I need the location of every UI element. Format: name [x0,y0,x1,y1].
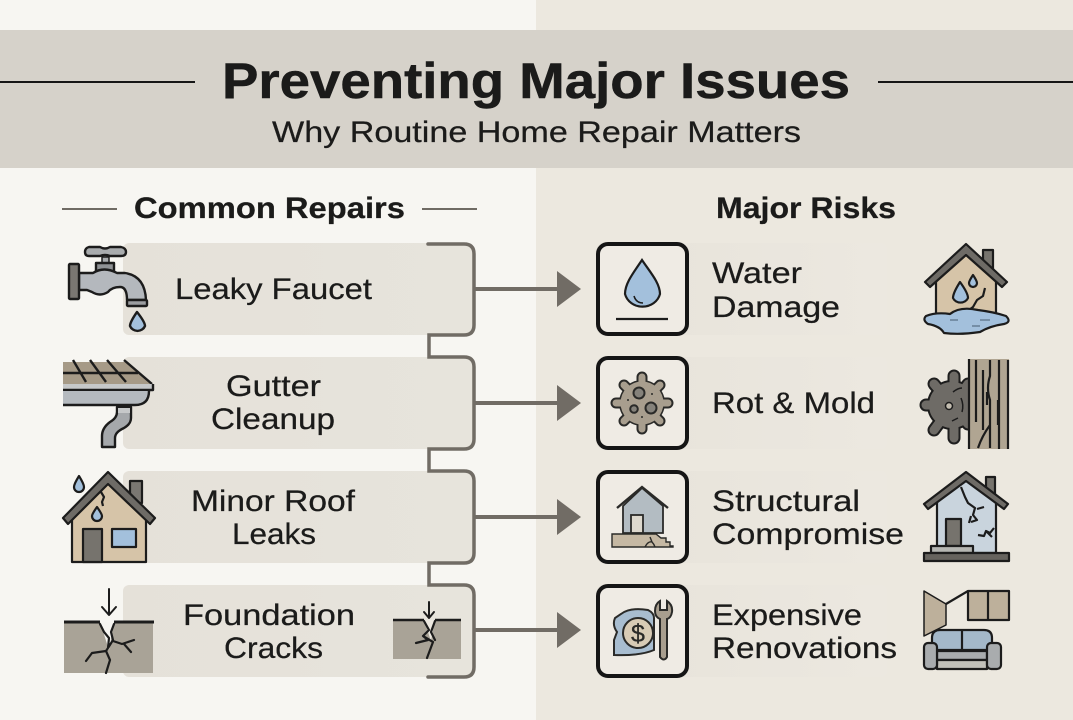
icon: rot on wood [926,359,1009,449]
panel: foundation cracks: Foundation [183,599,355,632]
panel: water damage: Damage [712,291,840,324]
icon: cracked house [924,472,1009,561]
icon box: mold spore [598,358,687,448]
panel: gutter cleanup: Gutter [226,370,321,403]
icon box: cost and wrench [598,586,687,676]
arrow: gutter to rot [475,385,581,421]
panel: minor roof leaks: Leaks [232,518,316,551]
panel: expensive renovations: Expensive [712,599,862,632]
icon: renovation room [924,591,1009,669]
icon: foundation crack large [64,589,154,673]
icon box: damaged house [598,472,687,562]
background: left column [0,0,536,720]
panel: expensive renovations: Renovations [712,632,897,665]
panel: rot and mold: Rot & Mold [712,387,875,420]
background: right column [536,0,1073,720]
arrow: roof to structural [475,499,581,535]
icon: foundation crack small [393,602,461,659]
arrow: faucet to water damage [475,271,581,307]
panel: structural compromise [597,471,904,563]
panel: minor roof leaks: Minor Roof [191,485,356,518]
icon: flooded house [924,244,1009,334]
panel: water damage: Water [712,257,802,290]
icon: gutter [63,360,154,447]
icon box: water drop [598,244,687,334]
heading: major risks: Major Risks [716,192,896,225]
panel: gutter cleanup: Cleanup [211,403,335,436]
panel: leaky faucet [123,243,473,335]
connector bracket [428,244,474,677]
panel: structural compromise: Structural [712,485,860,518]
header band [0,30,1073,168]
panel: foundation cracks [123,585,473,677]
icon box: cost and wrench: $ [631,620,645,648]
arrow: foundation to renovations [475,612,581,648]
panel: foundation cracks: Cracks [224,632,323,665]
panel: structural compromise: Compromise [712,518,904,551]
panel: rot and mold [597,357,887,449]
panel: minor roof leaks [123,471,473,563]
panel: leaky faucet: Leaky Faucet [175,273,373,306]
title: Preventing Major Issues [222,53,850,109]
icon: house with roof leak [63,472,155,562]
icon: faucet [69,247,147,331]
subtitle: Why Routine Home Repair Matters [272,116,801,149]
panel: water damage [597,243,887,335]
panel: gutter cleanup [123,357,473,449]
heading: common repairs: Common Repairs [134,192,405,225]
panel: expensive renovations [597,585,897,677]
